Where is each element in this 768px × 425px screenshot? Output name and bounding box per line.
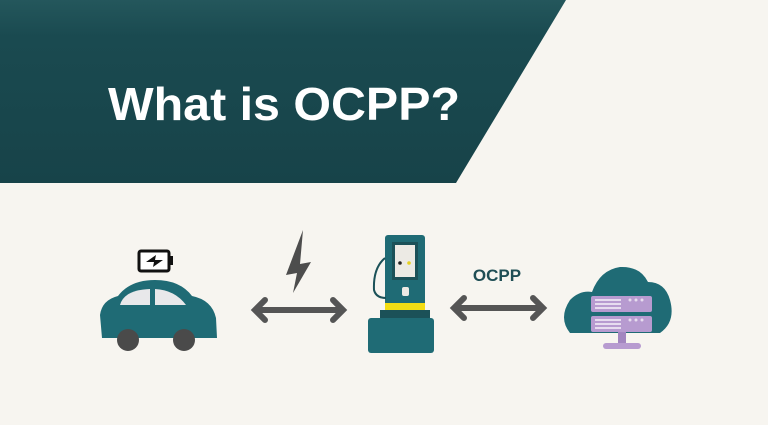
- title: What is OCPP?: [108, 78, 460, 130]
- icon: electric car: [100, 251, 217, 351]
- arrow: charger to cloud: [454, 298, 543, 318]
- icon: charging station: [368, 235, 434, 353]
- header banner: [0, 0, 566, 183]
- arrow: car to charger: [255, 300, 343, 320]
- icon: cloud server: [564, 267, 672, 349]
- icon: lightning: [286, 230, 311, 293]
- label: OCPP: OCPP: [473, 266, 521, 285]
